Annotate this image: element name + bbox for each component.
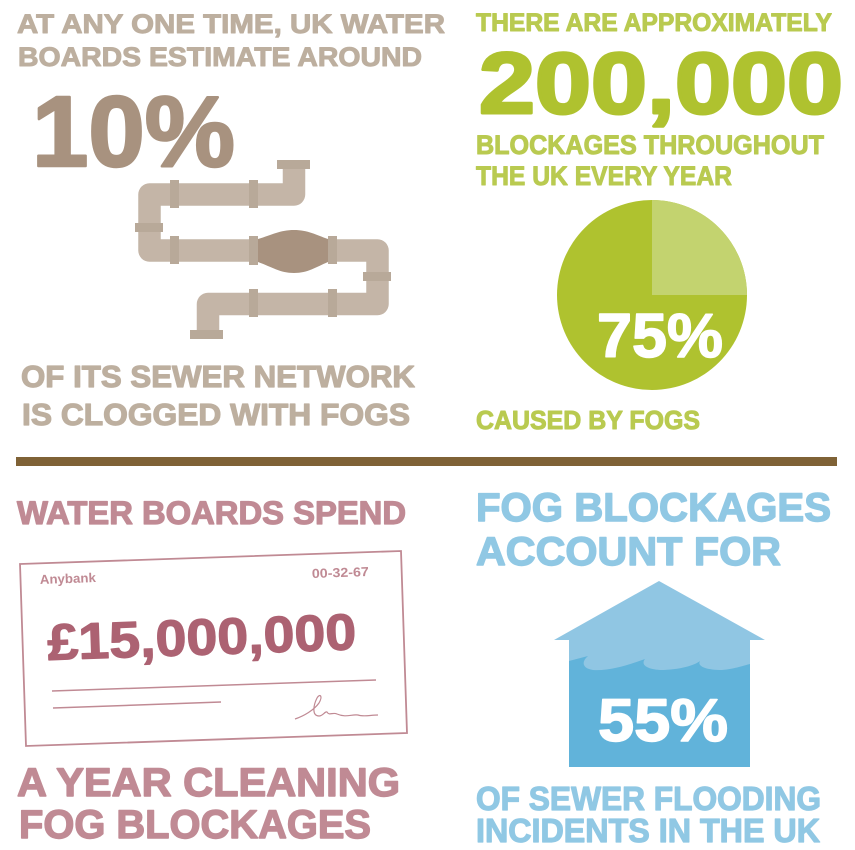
caption: sewer network <box>21 359 416 432</box>
panel: cost of cleaning <box>17 495 407 847</box>
icon: cheque: 00-32-67 <box>312 564 369 581</box>
pie chart: 75% <box>557 200 747 390</box>
heading: there are approximately: THERE ARE APPROXIMATELY <box>476 9 832 37</box>
icon: cheque <box>20 551 407 746</box>
icon: flooded house <box>554 581 765 767</box>
caption: a year cleaning fog blockages <box>17 761 400 847</box>
heading: fog blockages account for: FOG BLOCKAGES <box>476 486 831 530</box>
heading: fog blockages account for <box>476 486 831 574</box>
icon: flooded house: 55% <box>598 687 728 754</box>
panel: sewer flooding <box>476 486 831 849</box>
heading: water boards estimate <box>17 9 445 72</box>
icon: clogged pipe <box>135 160 391 339</box>
caption: sewer flooding incidents: OF SEWER FLOODING <box>476 780 821 817</box>
caption: a year cleaning fog blockages: FOG BLOCKAGES <box>19 803 371 847</box>
text: blockages throughout the UK <box>476 130 824 191</box>
pie chart: 75%: 75% <box>597 302 723 371</box>
caption: a year cleaning fog blockages: A YEAR CLEANING <box>17 761 400 805</box>
panel: sewer network clogged <box>17 9 445 432</box>
signature <box>295 696 378 719</box>
heading: water boards spend: WATER BOARDS SPEND <box>17 495 406 531</box>
heading: water boards estimate: AT ANY ONE TIME, UK WATER <box>17 9 445 39</box>
text: blockages throughout the UK: BLOCKAGES THROUGHOUT <box>476 130 824 160</box>
caption: sewer network: IS CLOGGED WITH FOGS <box>22 397 410 432</box>
big number: 10%: 10% <box>32 76 235 188</box>
text: blockages throughout the UK: THE UK EVERY YEAR <box>476 161 732 191</box>
icon: cheque: £15,000,000 <box>46 603 357 671</box>
heading: fog blockages account for: ACCOUNT FOR <box>476 530 781 574</box>
caption: sewer flooding incidents <box>476 780 821 849</box>
big number: 200,000: 200,000 <box>479 36 843 132</box>
heading: water boards estimate: BOARDS ESTIMATE AROUND <box>18 42 422 72</box>
panel: blockages per year <box>476 9 843 435</box>
caption: sewer flooding incidents: INCIDENTS IN THE UK <box>476 812 820 849</box>
divider <box>16 457 837 466</box>
caption: sewer network: OF ITS SEWER NETWORK <box>21 359 416 394</box>
icon: cheque: Anybank <box>40 570 97 587</box>
caption: caused by fogs: CAUSED BY FOGS <box>476 405 700 435</box>
clog <box>258 230 328 273</box>
